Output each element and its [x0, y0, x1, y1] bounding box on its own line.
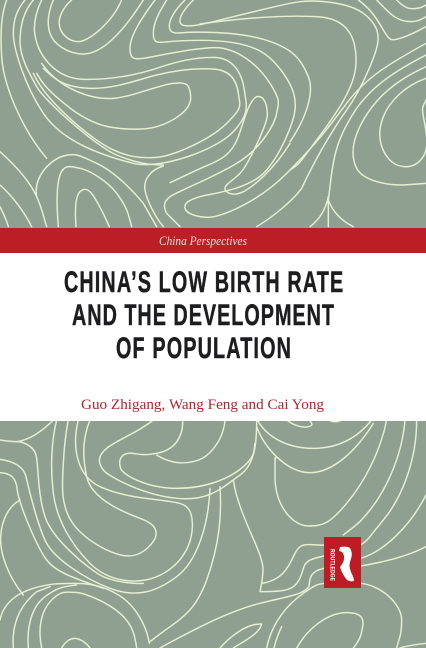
series name: China Perspectives [159, 233, 247, 248]
title [64, 266, 343, 365]
white title panel [0, 253, 426, 421]
contour line pattern: bottom [0, 420, 426, 648]
logo wordmark: ROUTLEDGE [328, 549, 336, 582]
red series band [0, 228, 426, 253]
logo R mark [339, 547, 354, 581]
authors: Guo Zhigang, Wang Feng and Cai Yong [81, 397, 324, 413]
title: OF POPULATION [116, 332, 291, 365]
publisher logo [324, 537, 361, 588]
title: CHINA’S LOW BIRTH RATE [64, 266, 343, 299]
contour line pattern: top [0, 0, 426, 227]
title: AND THE DEVELOPMENT [72, 299, 334, 332]
